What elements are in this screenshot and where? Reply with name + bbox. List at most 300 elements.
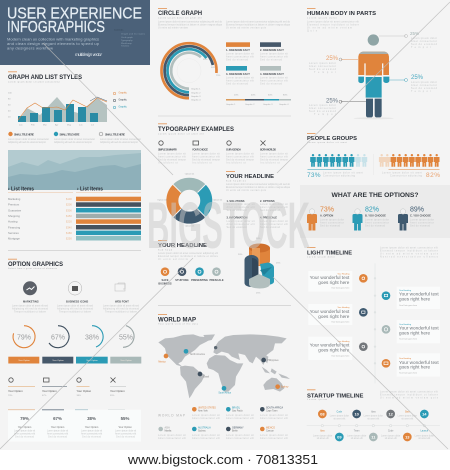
map legend: Lorem ipsum dolor sit (192, 414, 220, 417)
option values: 82% (365, 206, 379, 214)
intro text: and clean design elegant elements to speed up (7, 41, 100, 46)
list rows: Marketing (8, 197, 21, 201)
panel: typography examples: Lorem ipsum dolor sit (158, 152, 186, 156)
contents legend: World map (121, 42, 132, 45)
startup timeline diagram (307, 410, 440, 441)
fact tags: Amet consectetur elit (226, 80, 254, 82)
map legend: Amet consectetur elit (192, 437, 220, 440)
startup timeline diagram: Start (405, 411, 410, 414)
list rows: Premium (8, 203, 20, 207)
list rows: Hosting (8, 220, 18, 224)
heading: PEOPLE GROUPS (307, 136, 357, 142)
panel: option graphics: Adipiscing elit sed do eiusmod (12, 308, 49, 310)
panel: startup timeline: Ut enim ad minim veniam quis (380, 396, 439, 400)
timeline nodes (359, 274, 390, 368)
timeline card text: Your wonderful text (399, 326, 439, 331)
your headline text block: Ut enim ad minim veniam quis (226, 189, 267, 192)
option icon row: Your Option (42, 389, 57, 393)
map legend: MEXICO (266, 428, 275, 430)
three note items (8, 132, 141, 144)
startup timeline diagram: 12 (388, 411, 394, 416)
percent 82: 82% (426, 172, 440, 179)
option cards: Amet consectetur elit (47, 432, 68, 436)
map legend: BRAZIL (232, 406, 241, 410)
map legend: Lorem ipsum dolor sit (226, 414, 254, 417)
panel: typography examples: Amet consectetur elit (158, 156, 186, 158)
panel: graph and list styles: $150 (66, 214, 72, 218)
map legend (158, 406, 288, 440)
heading: HUMAN BODY IN PARTS (307, 11, 376, 17)
heading: GRAPH AND LIST STYLES (8, 75, 82, 81)
panel: what are the options: Lorem ipsum dolor (320, 218, 344, 222)
panel: typography examples: Amet consectetur elit (192, 156, 220, 158)
map legend: Lorem ipsum dolor sit (260, 434, 288, 437)
segmented progress bar: 80% (283, 94, 287, 96)
three note items: Lorem ipsum dolor sit amet consectetur (8, 138, 49, 141)
panel: option graphics: Tempor incididunt ut labore (14, 310, 47, 314)
callouts: Amet consectetur (411, 84, 437, 87)
fact tags: Sed do eiusmod (260, 58, 283, 62)
option icon row: Your Option (110, 389, 125, 393)
fact tags: Sed do eiusmod (226, 82, 249, 86)
radial labels (191, 59, 220, 102)
ring percentages: 55% (119, 334, 133, 342)
panel: startup timeline (307, 390, 440, 441)
startup timeline diagram: Team (354, 431, 360, 433)
option values (320, 206, 424, 214)
your headline text block: Sed do eiusmod (260, 209, 281, 212)
panel: human body in parts: Lorem ipsum dolor (307, 16, 337, 20)
panel: option graphics: Tempor incididunt ut labore (59, 310, 92, 314)
icon circles (161, 267, 221, 276)
list rows: Guarantee (8, 208, 22, 212)
panel: typography examples (157, 124, 291, 229)
segmented progress bar: 40% (251, 94, 255, 96)
heading: YOUR HEADLINE (158, 243, 207, 249)
option cards: 38% (87, 416, 96, 421)
panel: second headline with icons: SAFE (162, 278, 169, 282)
your headline text block: YOUR HEADLINE (226, 174, 274, 180)
timeline card text: goes right here (318, 280, 350, 285)
panel: second headline with icons: Sub head (158, 250, 173, 252)
percent 73: 73% (307, 172, 321, 179)
segmented progress bar: Graphic 1 (226, 103, 236, 106)
timeline card text (310, 272, 439, 375)
panel: typography examples: YOUR CHOICE (192, 148, 208, 152)
panel: typography examples: OUR AGENDA (226, 148, 241, 152)
your headline text block: Sed do eiusmod (226, 209, 247, 212)
startup timeline diagram: Lorem ipsum dolor (313, 434, 333, 437)
map legend: Amet consectetur elit (226, 417, 254, 420)
your headline text block: Lorem ipsum dolor sit (260, 220, 288, 223)
title second line: INFOGRAPHICS (7, 19, 105, 36)
your headline text block: 2. OPTIONS (260, 199, 275, 203)
panel: typography examples: Lorem ipsum dolor sit amet elit (158, 132, 204, 135)
icon: outlined circle (68, 282, 82, 295)
callouts: Tempor (314, 71, 336, 74)
donut labels (157, 172, 223, 228)
map continents and pins: South Africa (218, 392, 232, 395)
startup timeline diagram: sit amet elit (351, 437, 363, 440)
startup timeline diagram: sit amet elit (418, 437, 431, 440)
callouts: 25% (411, 75, 424, 81)
option icon row: 79% (8, 395, 12, 397)
footer stock credit: www.bigstock.com · 70813351 (127, 453, 318, 467)
callouts: Sed do eiusmod (309, 110, 337, 113)
option buttons: Your Option (18, 359, 31, 362)
panel: people groups: Lorem ipsum dolor sit amet (307, 141, 347, 144)
callouts: Amet consectetur (309, 65, 336, 68)
panel: light timeline (307, 246, 440, 383)
panel: what are the options: Sed do eiusmod (365, 224, 386, 228)
timeline card text: Your Date goes here (331, 355, 350, 358)
map legend: Lorem ipsum dolor sit (192, 434, 220, 437)
chart: combined area and bars: 100 (8, 92, 12, 94)
map legend: Sydney (198, 430, 207, 432)
map continents and pins: Brazil (203, 376, 210, 379)
panel: what are the options: Lorem ipsum dolor (410, 218, 434, 222)
callouts: Lorem ipsum dolor (411, 81, 437, 84)
panel: option graphics: Lorem ipsum dolor sit amet elit sed (12, 304, 49, 308)
panel: second headline with icons: Eiusmod tempor incididunt ut labore et dolore (158, 255, 219, 258)
map legend: Amet consectetur elit (158, 437, 186, 440)
timeline card text: goes right here (399, 330, 430, 335)
fact tags: Amet consectetur elit (260, 80, 288, 82)
timeline card text: goes right here (399, 365, 430, 370)
option cards: Sed do eiusmod (15, 436, 35, 438)
your headline text block: Sed do eiusmod (226, 226, 247, 229)
map legend: Lorem ipsum dolor sit (226, 434, 254, 437)
heading: STARTUP TIMELINE (307, 394, 364, 400)
heading: WHAT ARE THE OPTIONS? (332, 192, 419, 199)
startup timeline diagram: Lorem ipsum dolor (381, 434, 401, 437)
startup timeline diagram: sit amet elit (317, 437, 329, 440)
panel: graph and list styles: $250 (66, 236, 72, 240)
panel: graph and list styles (8, 72, 141, 250)
list rows: Shopping (8, 214, 20, 218)
panel: human body in parts: Ut enim ad minim veniam (307, 26, 352, 30)
panel: typography examples: Incididunt ut (226, 162, 246, 164)
your headline text block: 1. SOLUTIONS (226, 199, 245, 203)
callouts: Lorem ipsum dolor (309, 62, 336, 65)
fact tags (226, 42, 288, 86)
ring percentages (17, 334, 133, 342)
map legend: Cape Town (266, 410, 278, 412)
three note items: SMALL TITLE HERE (60, 132, 80, 136)
figure: segmented human body (354, 34, 394, 119)
chart: segmented donut (170, 182, 208, 220)
radial labels: 75% (216, 75, 220, 77)
map continents and pins: Mexico (158, 362, 166, 364)
segmented progress bar: 60% (268, 94, 272, 96)
chart legend: Graphic (118, 98, 128, 102)
panel: what are the options: C. YOU CHOOSE (410, 214, 431, 218)
panel: second headline with icons: PRESCALE (209, 278, 224, 282)
panel: typography examples: Sed do eiusmod tempor (158, 158, 186, 162)
option cards: Lorem ipsum dolor sit (47, 430, 68, 432)
contents legend: Circle graph (121, 36, 134, 39)
panel: light timeline: Lorem ipsum dolor (307, 256, 335, 258)
panel: what are the options: Sed do eiusmod (410, 224, 431, 228)
panel: typography examples: Sed do eiusmod tempor (192, 158, 220, 162)
contents legend: Graph and list styles (121, 32, 146, 36)
chart: combined area and bars: Jan (19, 124, 23, 126)
startup timeline diagram: sit amet elit (385, 437, 397, 440)
option cards: Amet consectetur elit (81, 432, 102, 436)
panel: second headline with icons: Ut enim ad minim (158, 258, 188, 261)
map legend: SOUTH AFRICA (266, 406, 283, 410)
radial labels: Graphic 1 (191, 88, 201, 90)
chart: combined area and bars: 40 (8, 110, 11, 112)
your headline text block: Lorem ipsum dolor sit (226, 203, 255, 206)
timeline card text: Your wonderful text (399, 292, 439, 297)
callouts: Amet consectetur (411, 40, 437, 43)
chart: combined area and bars: Jul (91, 124, 94, 126)
people icons teal (310, 154, 367, 167)
timeline card text: Your wonderful text (399, 360, 439, 365)
option cards: 67% (53, 416, 62, 421)
chart: combined area and bars: May (67, 124, 72, 126)
segmented progress bar (226, 94, 291, 106)
option cards: Lorem ipsum dolor sit (14, 430, 35, 432)
startup timeline diagram: 09 (337, 434, 342, 439)
option cards: Sed do eiusmod (82, 436, 102, 438)
startup timeline diagram: 11 (371, 434, 376, 439)
panel: option graphics: Adipiscing elit sed do eiusmod (103, 308, 140, 310)
option cards: Your Option (118, 425, 132, 429)
three note items: Adipiscing elit sed do eiusmod tempor (100, 141, 138, 144)
signature: multidesign vector (75, 52, 102, 57)
panel: option graphics: Lorem ipsum dolor sit amet elit sed (57, 304, 94, 308)
callouts: Tempor (411, 46, 431, 49)
startup timeline diagram: 10 (354, 411, 360, 416)
list rows: Services (8, 231, 19, 235)
panel: second headline with icons: STUDYING (175, 278, 189, 282)
option buttons: Your Option (52, 359, 65, 362)
panel: header banner (0, 0, 150, 65)
panel: option graphics: MARKETING (23, 300, 39, 304)
panel: what are the options: B. YOU CHOOSE (365, 214, 386, 218)
panel: light timeline: Lorem ipsum dolor sit amet consectetur elit (380, 246, 438, 250)
timeline card text: Your Heading (399, 323, 411, 326)
map legend: UNITED STATES (198, 406, 216, 410)
heading: CIRCLE GRAPH (158, 11, 202, 17)
panel: what are the options: Sed do eiusmod (320, 224, 341, 228)
startup timeline diagram: sit amet elit (333, 417, 346, 420)
radial labels: Graphic 4 (191, 98, 201, 102)
callouts (309, 31, 438, 116)
progress rings (13, 326, 134, 348)
panel: startup timeline: Eiusmod tempor incididunt ut labore (380, 394, 439, 396)
radial labels: Graphic 2 (191, 91, 201, 94)
panel: graph and list styles: $200 (66, 203, 72, 207)
chart: stacked area band (8, 150, 141, 190)
timeline card text: Your Date goes here (399, 372, 418, 375)
chart: combined area and bars: Feb (31, 124, 36, 126)
timeline card text: Your Heading (337, 272, 349, 275)
panel: circle graph: Eiusmod tempor incididunt ut labore et dolore magna aliqua (226, 24, 291, 26)
your headline text block: Amet consectetur elit (226, 223, 255, 226)
option cards: Lorem ipsum dolor sit (81, 430, 102, 432)
chart legend: Graphic (118, 92, 128, 94)
panel: second headline with icons (158, 238, 291, 306)
panel: graph and list styles: $300 (66, 208, 72, 212)
timeline diagram (308, 263, 440, 383)
chart: 3d exploded pie (238, 238, 280, 294)
option cards: Lorem ipsum dolor sit (115, 430, 136, 432)
your headline text block: Lorem ipsum dolor sit amet consectetur adipiscing elit sed do (226, 183, 291, 186)
timeline card text: Your Date goes here (331, 320, 350, 323)
timeline card text: goes right here (318, 314, 350, 319)
intro text: any designers workflow (7, 46, 53, 50)
panel: typography examples: Amet consectetur elit (226, 156, 254, 158)
map legend: Amet consectetur elit (226, 437, 254, 440)
option buttons: Your Option (86, 359, 99, 362)
people icons orange (379, 154, 440, 167)
panel: people groups (307, 133, 440, 179)
option values: 73% (320, 206, 334, 214)
donut labels: Option 03 (185, 224, 195, 228)
chart: radial arcs (161, 43, 216, 98)
option cards: Your Option (85, 425, 99, 429)
chart: combined area and bars: Jun (79, 124, 83, 126)
panel: people groups: Lorem ipsum dolor sit amet (382, 172, 422, 174)
map continents and pins (158, 334, 290, 398)
your headline text block (226, 171, 291, 229)
icons row (159, 140, 266, 146)
timeline card text: Your Heading (337, 340, 349, 343)
panel: what are the options (300, 185, 450, 238)
heading: WORLD MAP (158, 317, 196, 323)
three note items: Adipiscing elit sed do eiusmod tempor (54, 141, 92, 144)
panel: circle graph: Ut enim ad minim veniam quis (226, 26, 267, 30)
fact tags: 4. AWESOME FACT (260, 72, 284, 76)
map legend: ASIA (164, 426, 170, 430)
map legend: Amet consectetur elit (260, 417, 288, 420)
ring percentages: 67% (51, 334, 65, 342)
chart: 3d exploded pie: 25% (256, 292, 260, 294)
panel: people groups: Lorem ipsum dolor sit amet (323, 172, 363, 174)
timeline cards (308, 271, 440, 377)
panel: circle graph: Lorem ipsum dolor sit amet consectetur adipiscing elit sed do (158, 20, 223, 24)
fact tags: Lorem ipsum dolor sit (260, 76, 288, 80)
contents legend: Timeline (121, 46, 130, 48)
contents legend: Contents (114, 28, 124, 32)
panel: what are the options: Amet consectetur (320, 222, 344, 224)
startup timeline diagram: Code (388, 431, 394, 433)
panel: option graphics: BUSINESS ICONS (66, 300, 88, 304)
callouts: Sed do eiusmod (411, 43, 438, 46)
contents legend (114, 28, 146, 48)
option cards: 79% (20, 416, 29, 421)
map legend: GERMANY (232, 426, 244, 430)
map legend: Manila (164, 430, 172, 432)
list heading right: › List Items (77, 186, 103, 192)
chart: 3d exploded pie: 20% (238, 254, 242, 256)
startup timeline diagram: Lorem ipsum dolor (364, 415, 383, 418)
panel: light timeline: Eiusmod tempor incididunt ut labore (380, 250, 439, 252)
footer stock credit (0, 450, 450, 470)
callouts: 25% (326, 56, 339, 62)
startup timeline diagram: Lorem ipsum dolor (415, 434, 434, 437)
your headline text block: Amet consectetur elit (260, 206, 288, 209)
startup timeline diagram: 08 (320, 411, 325, 416)
your headline text block: 4. PRESCALE (260, 216, 277, 220)
panel: option graphics: Select from a great choice of elements (8, 267, 58, 270)
startup timeline diagram: Idea (320, 431, 325, 433)
startup timeline diagram: Launch (421, 431, 429, 433)
chart: combined area and bars: Apr (55, 124, 59, 126)
timeline card text: Your Date goes here (399, 338, 418, 341)
panel: human body in parts: Eiusmod tempor incididunt ut labore (307, 24, 360, 26)
panel: typography examples: Sed do eiusmod tempor (260, 158, 288, 162)
option icon row: 38% (76, 395, 81, 397)
map legend: Sao Paulo (232, 410, 243, 412)
panel: typography examples: Lorem ipsum dolor sit (192, 152, 220, 156)
your headline text block: Amet consectetur elit (226, 206, 255, 209)
map legend: New York (198, 410, 209, 412)
panel: circle graph: Eiusmod tempor incididunt ut labore et dolore magna aliqua (158, 24, 223, 26)
panel: graph and list styles: $180 (66, 231, 72, 235)
option buttons: Your Option (120, 359, 133, 362)
option cards: Amet consectetur elit (115, 432, 136, 436)
panel: graph and list styles: Lorem ipsum dolor sit amet consectetur (8, 80, 60, 83)
chart legend: Graphic (118, 106, 128, 108)
map continents and pins: Philippines (267, 360, 279, 362)
radial labels: Graphic 3 (191, 95, 201, 98)
panel: second headline with icons: BUSINESS (158, 282, 172, 286)
timeline card text: Your Heading (337, 306, 349, 309)
donut labels: Option 02 (213, 198, 223, 202)
fact tags: Amet consectetur elit (260, 56, 288, 58)
icon: pencil (115, 283, 125, 291)
panel: what are the options: Lorem ipsum dolor (365, 218, 389, 222)
fact tags: Sed do eiusmod (226, 58, 249, 62)
panel: graph and list styles: $340 (66, 225, 72, 229)
list bars (76, 197, 141, 240)
intro text (7, 36, 100, 50)
callouts: Sed do eiusmod (411, 87, 438, 90)
panel: typography examples: Amet consectetur elit (260, 156, 288, 158)
donut labels: Option 01 (185, 172, 195, 176)
option cards: Sed do eiusmod (116, 436, 136, 438)
map legend: Amet consectetur elit (260, 437, 288, 440)
timeline card text: Your Heading (399, 289, 411, 292)
chart: combined area and bars: Mar (43, 124, 47, 126)
segmented progress bar: Graphic 2 (245, 103, 255, 106)
icon: dark circle (23, 281, 37, 295)
fact tags: Lorem ipsum dolor sit (226, 76, 254, 80)
panel: option graphics: Lorem ipsum dolor sit amet elit sed (103, 304, 140, 308)
three note items: Lorem ipsum dolor sit amet consectetur (54, 138, 95, 141)
map continents and pins: Sydney (281, 387, 289, 389)
panel: typography examples: Incididunt ut (260, 162, 280, 164)
your headline text block: 3. INFORMATION (226, 216, 248, 220)
option cards: Your Option (18, 425, 32, 429)
heading: LIGHT TIMELINE (307, 250, 352, 256)
map legend: Cancun (266, 430, 275, 432)
panel: circle graph: Lorem ipsum dolor sit amet consectetur adipiscing elit sed do (226, 20, 291, 24)
timeline card text: Your wonderful text (310, 275, 350, 280)
panel: startup timeline: Lorem ipsum dolor sit amet consectetur elit (380, 390, 438, 394)
contents legend: Typography (121, 39, 133, 42)
chart: combined area and bars: 20 (8, 116, 11, 118)
your headline text block: Lorem ipsum dolor sit (260, 203, 288, 206)
panel: typography examples: Incididunt ut (158, 162, 178, 164)
panel: world map: Your world view of the data (158, 322, 199, 325)
map legend: Lorem ipsum dolor sit (158, 434, 186, 437)
timeline card text: Your Date goes here (331, 286, 350, 289)
